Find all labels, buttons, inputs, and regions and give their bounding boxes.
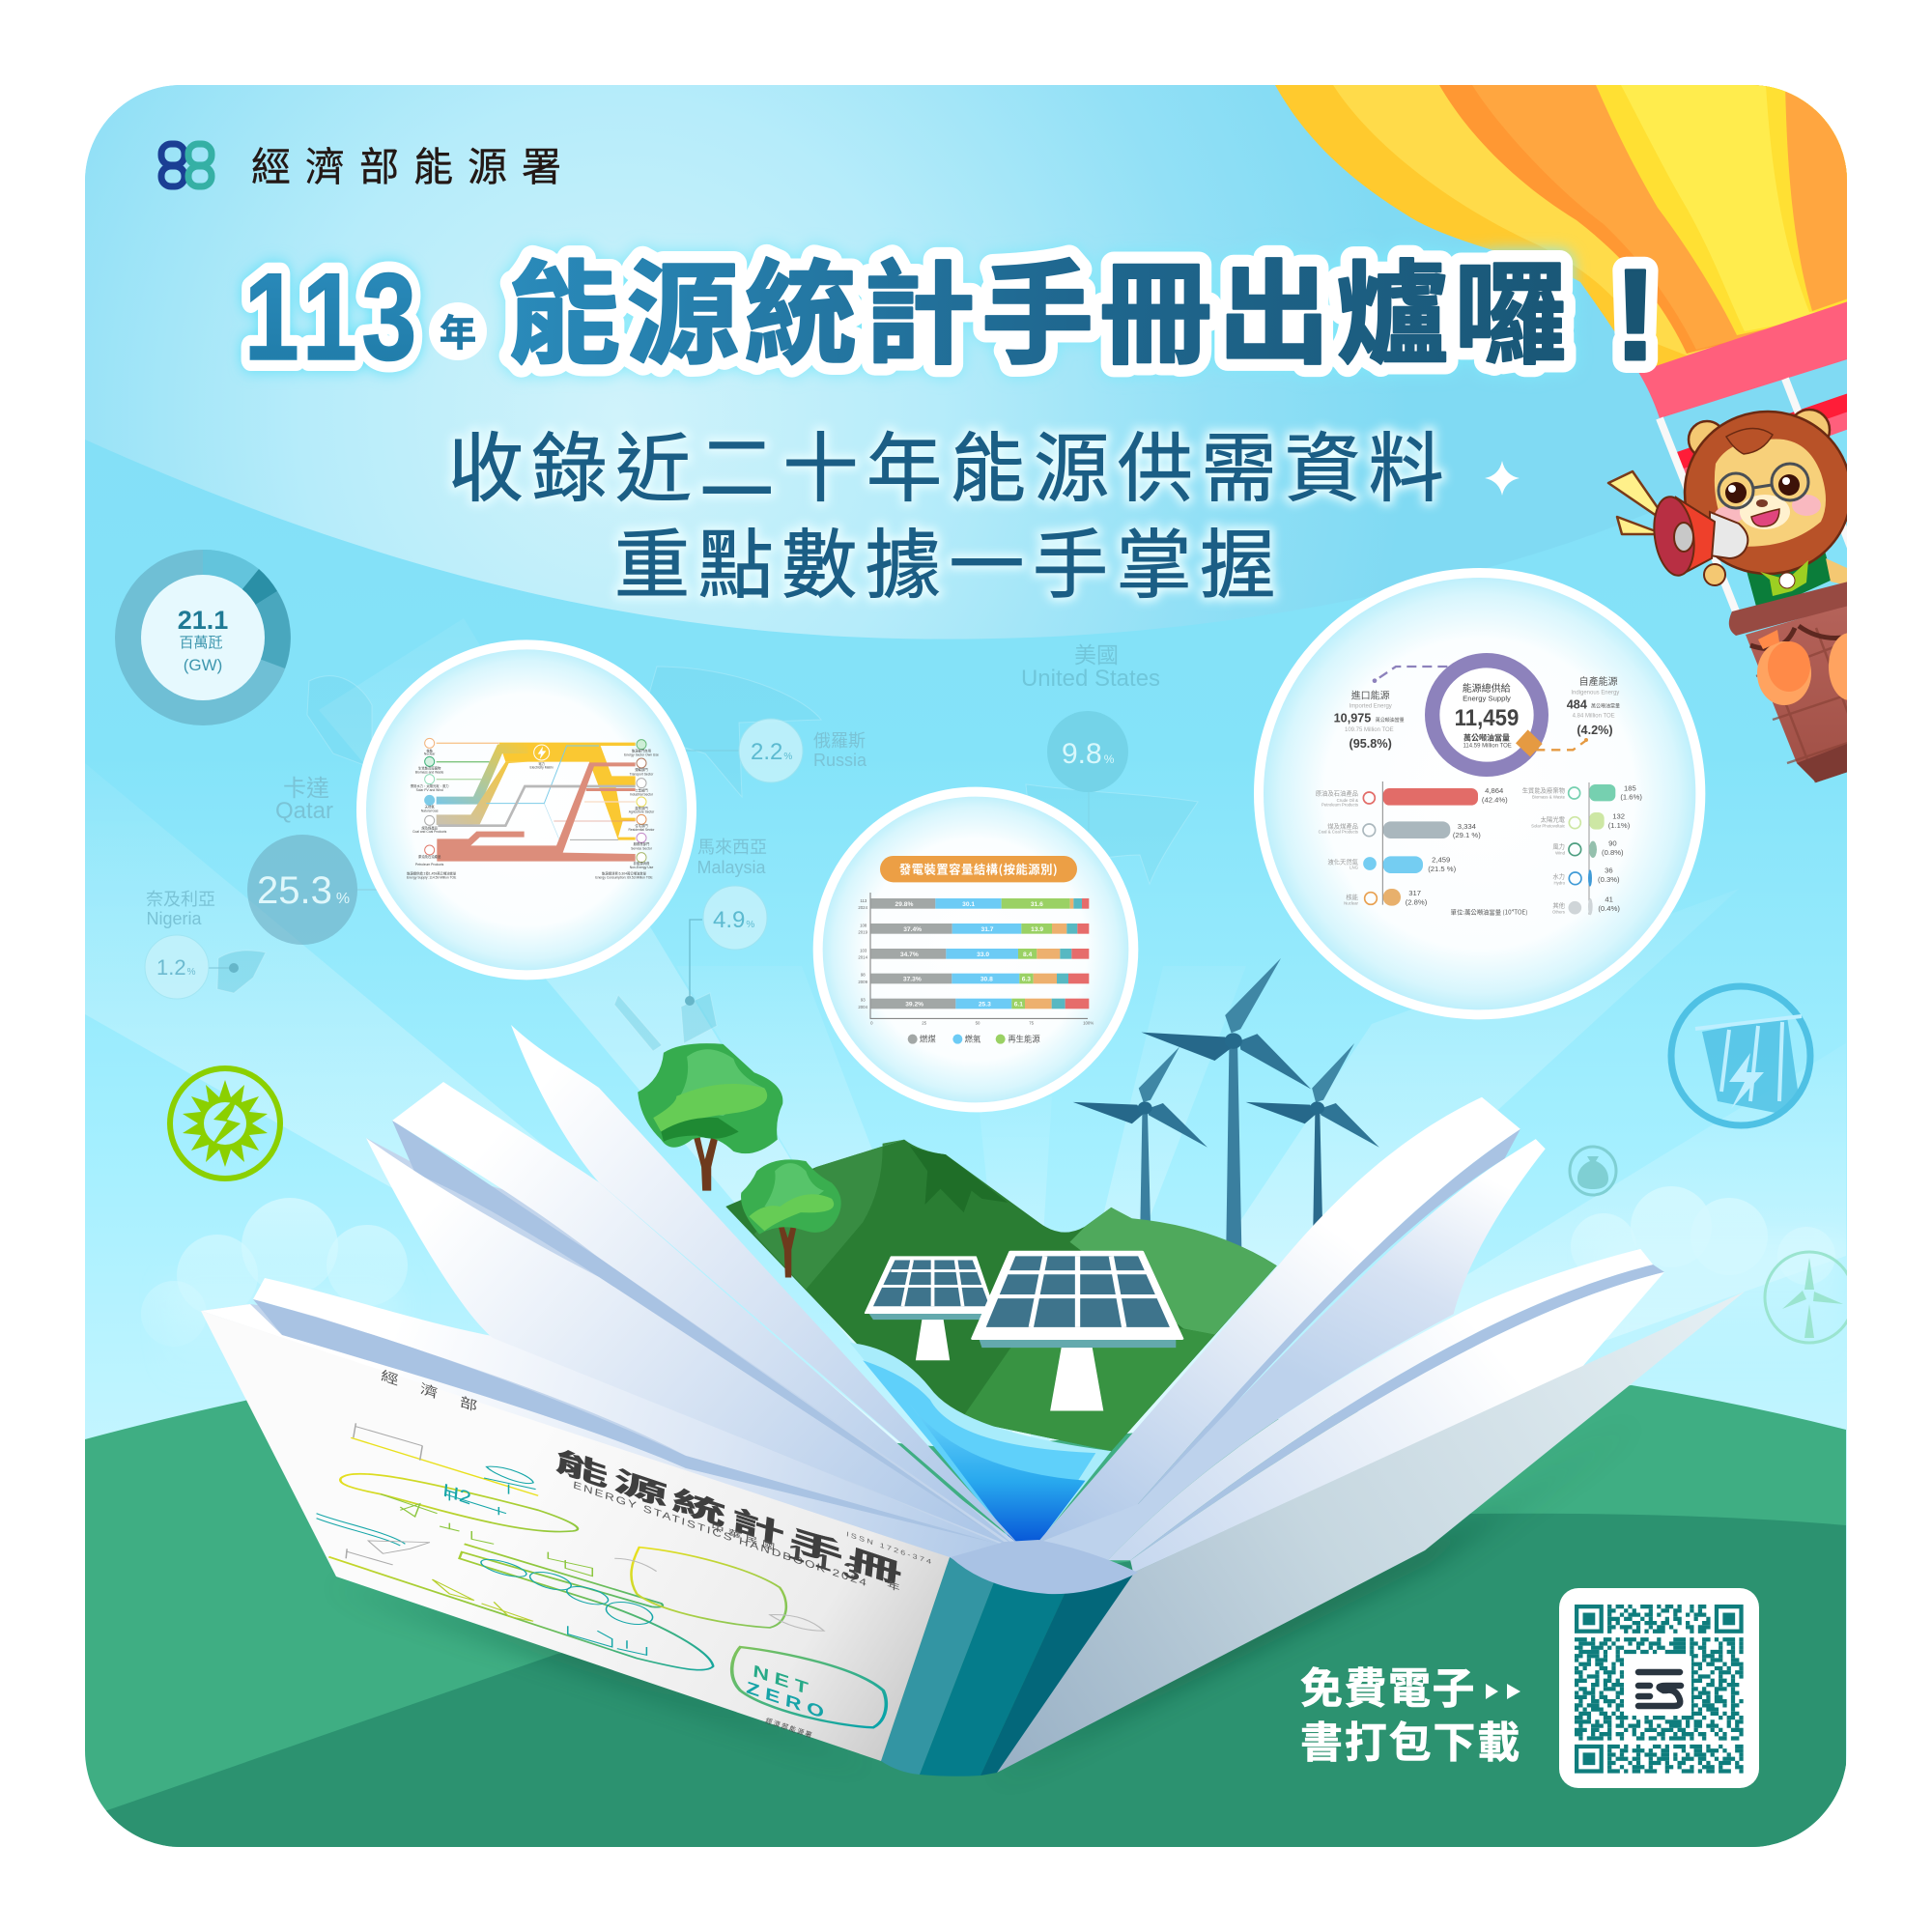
title main: 能源統計手冊出爐囉 xyxy=(508,224,1573,386)
country stat: United States: 美國 xyxy=(1074,637,1119,669)
subtitle: 收錄近二十年能源供需資料 xyxy=(448,409,1452,517)
cover text: 經濟部 xyxy=(381,1364,500,1423)
imports bar chart: 原油及石油產品 xyxy=(1316,788,1358,797)
donut 21.1 GW: 21.1 xyxy=(178,606,228,635)
imported energy label: 109.75 Million TOE xyxy=(1345,727,1394,733)
stacked bars: 34.7% xyxy=(900,952,919,958)
indigenous bar chart: 185 xyxy=(1624,784,1636,793)
big circle: energy supply xyxy=(1259,573,1700,1014)
balloon red band xyxy=(1638,298,1860,418)
country stat: Russia xyxy=(676,719,867,782)
indigenous bar chart: 36 xyxy=(1605,867,1613,875)
imports bar chart: (29.1 %) xyxy=(1453,831,1481,839)
face xyxy=(1715,428,1826,547)
front cover xyxy=(201,1311,950,1761)
imports bar chart: Crude Oil & xyxy=(1337,798,1358,803)
indigenous bar chart: (0.8%) xyxy=(1602,848,1624,857)
dark green hill xyxy=(85,1514,1846,1847)
axes and tick labels: 93 xyxy=(861,998,866,1003)
country stat: Malaysia: 馬來西亞 xyxy=(697,834,767,859)
cover text: NET xyxy=(753,1662,814,1700)
icon: bag xyxy=(1570,1147,1616,1195)
imported energy label: (95.8%) xyxy=(1350,737,1392,751)
imports bar chart: (21.5 %) xyxy=(1428,865,1457,873)
country stat: Nigeria xyxy=(145,886,239,999)
country stat: United States: 9.8% xyxy=(1062,738,1115,770)
sankey labels: 服務業部門 xyxy=(634,841,650,846)
sankey labels: 電力 xyxy=(538,761,546,766)
icon: wind turbine xyxy=(1765,1252,1854,1343)
axes and tick labels: 103 xyxy=(860,948,867,952)
country stat: Qatar: 卡達 xyxy=(283,769,329,803)
country stat: Russia: 2.2% xyxy=(751,739,792,765)
indigenous bar chart: Hydro xyxy=(1553,880,1566,885)
sankey labels: Transport Sector xyxy=(630,772,654,776)
light green hill xyxy=(85,1385,1846,1847)
stacked bars: 31.6 xyxy=(1031,901,1043,908)
sankey labels: 能源總消費:6,304萬公噸油當量 xyxy=(602,870,647,875)
stacked bars: 33.0 xyxy=(977,952,989,958)
axes and tick labels: 75 xyxy=(1029,1021,1035,1026)
country stat: Nigeria: 1.2% xyxy=(156,955,196,980)
megaphone sound spikes xyxy=(1608,471,1669,534)
big circle: Sankey chart xyxy=(361,644,692,975)
upper light wave xyxy=(85,85,1277,639)
country stat: Qatar: Qatar xyxy=(275,798,333,824)
axes and tick labels: 2009 xyxy=(858,980,868,984)
stacked bars: 30.8 xyxy=(980,977,993,983)
icon: green sun bolt xyxy=(170,1068,280,1179)
sankey labels: 核能 xyxy=(426,748,434,753)
country stat: Russia: Russia xyxy=(813,751,867,770)
indigenous energy label: (4.2%) xyxy=(1577,724,1613,737)
imported energy label: 進口能源 xyxy=(1351,687,1390,701)
legend xyxy=(908,1034,1040,1045)
stacked bars: 31.7 xyxy=(981,926,994,933)
sankey labels: Service Sector xyxy=(631,846,653,850)
axes and tick labels: 2019 xyxy=(858,930,868,935)
imports bar chart: (42.4%) xyxy=(1482,796,1508,805)
call to action: 書打包下載 xyxy=(1300,1708,1521,1770)
axes and tick labels: 2024 xyxy=(858,905,868,910)
imports bar chart: 核能 xyxy=(1346,893,1359,901)
subtitle: 重點數據一手掌握 xyxy=(614,505,1284,613)
open book xyxy=(201,1025,1745,1777)
large turbine xyxy=(1141,958,1311,1250)
balloon ropes xyxy=(1660,379,1860,611)
logo mark xyxy=(161,144,212,186)
sankey labels: Energy Sector Own Use xyxy=(624,753,659,756)
indigenous bar chart: (0.3%) xyxy=(1598,875,1620,884)
indigenous bar chart: Others xyxy=(1552,909,1565,914)
right pages xyxy=(1037,1097,1664,1573)
legend: 燃氣 xyxy=(965,1034,980,1045)
chart title pill: 發電裝置容量結構(按能源別) xyxy=(899,861,1058,878)
book spine xyxy=(881,1540,1138,1776)
supply donut xyxy=(1373,661,1588,769)
sparkle xyxy=(1485,461,1520,496)
stacked bars: 8.4 xyxy=(1023,952,1033,958)
imports bar chart: Nuclear xyxy=(1344,900,1359,905)
indigenous bar chart: 90 xyxy=(1608,839,1617,848)
wind turbines xyxy=(1073,958,1379,1250)
country stat: Qatar: 25.3% xyxy=(257,869,350,912)
call to action xyxy=(1300,1654,1521,1770)
indigenous energy label: 484 xyxy=(1567,697,1587,711)
scarf and badge xyxy=(1760,558,1847,596)
chart title pill xyxy=(880,856,1077,882)
imported energy label: 萬公噸油當量 xyxy=(1376,717,1405,724)
axes and tick labels: 98 xyxy=(861,973,866,978)
stacked bars: 6.3 xyxy=(1022,977,1031,983)
sankey labels: Industrial Sector xyxy=(630,792,654,796)
supply donut: 114.59 Million TOE xyxy=(1463,744,1512,750)
basket xyxy=(1729,579,1871,782)
imported energy label xyxy=(1334,687,1405,751)
supply donut: Energy Supply xyxy=(1463,694,1511,702)
country stat: Malaysia: 4.9% xyxy=(713,907,754,933)
megaphone xyxy=(1649,495,1747,578)
sankey labels: Energy Consumption: 69.53 Million TOE xyxy=(595,875,653,879)
indigenous bar chart: 其他 xyxy=(1552,900,1566,909)
arrows xyxy=(1486,1684,1520,1699)
country stat: Nigeria: 奈及利亞 xyxy=(146,886,215,911)
QR code xyxy=(1559,1588,1759,1788)
indigenous bar chart: 生質能及廢棄物 xyxy=(1522,786,1566,795)
supply donut: 萬公噸油當量 xyxy=(1463,732,1510,743)
indigenous bar chart: 41 xyxy=(1605,895,1613,903)
cover text: H2 xyxy=(442,1480,472,1509)
subtitle xyxy=(448,409,1452,613)
sankey labels: Solar PV and Wind xyxy=(416,788,443,792)
tree large xyxy=(638,1043,782,1191)
indigenous energy label: 自產能源 xyxy=(1579,673,1618,688)
axes and tick labels: 108 xyxy=(860,923,867,927)
country stat: Qatar xyxy=(247,769,425,945)
imports bar chart: 4,864 xyxy=(1485,786,1504,795)
axes and tick labels: 100% xyxy=(1083,1021,1094,1026)
mane and ears xyxy=(1685,410,1851,574)
indigenous bar chart: Biomass & Waste xyxy=(1532,795,1566,800)
supply donut: 能源總供給 xyxy=(1463,680,1511,695)
stacked bars xyxy=(871,898,1089,1009)
icon: blue building xyxy=(1671,986,1810,1125)
cover text: 經濟部能源署 xyxy=(764,1716,814,1741)
stacked bars: 30.1 xyxy=(962,901,975,908)
left turbine xyxy=(1073,1047,1208,1226)
axes and tick labels: 50 xyxy=(976,1021,980,1026)
indigenous bar chart: 風力 xyxy=(1552,841,1565,850)
imports bar chart: 3,334 xyxy=(1458,822,1477,831)
indigenous energy label xyxy=(1567,673,1620,737)
cover text: 113 xyxy=(786,1539,872,1590)
sankey labels: 能源部門自用 xyxy=(632,748,651,753)
axes and tick labels: 2004 xyxy=(858,1005,868,1009)
sankey labels: Electricity Matrix xyxy=(530,766,554,770)
sankey labels: Nuclear xyxy=(424,752,436,755)
country stat: United States xyxy=(1021,637,1160,831)
imports bar chart: 液化天然氣 xyxy=(1327,857,1359,866)
title year: 113 xyxy=(244,247,416,386)
title main: 能源統計手冊出爐囉 xyxy=(508,224,1573,386)
axes and tick labels: 0 xyxy=(870,1021,873,1026)
cover text: 能源統計手冊 xyxy=(554,1438,909,1595)
sankey labels: Agriculture Sector xyxy=(629,810,655,814)
title main: ! xyxy=(1614,243,1657,387)
sankey labels: 生質能及廢棄物 xyxy=(418,766,441,771)
supply donut: 11,459 xyxy=(1455,705,1519,731)
indigenous bar chart: 132 xyxy=(1612,812,1625,821)
country stat: United States: United States xyxy=(1021,666,1160,692)
legend: 燃煤 xyxy=(920,1034,936,1045)
back cover xyxy=(997,1292,1745,1773)
big circle: power capacity bar chart xyxy=(818,792,1133,1107)
sankey labels: 煤及煤產品 xyxy=(421,825,439,830)
hills xyxy=(85,1385,1846,1847)
world map background xyxy=(217,667,1198,1051)
indigenous bar chart: (0.4%) xyxy=(1598,904,1620,913)
sankey nodes xyxy=(425,738,646,863)
imports bar chart: LNG xyxy=(1350,866,1359,870)
QR centre mark xyxy=(1638,1672,1681,1706)
sankey labels: 農業部門 xyxy=(635,806,648,810)
shirt xyxy=(1744,536,1833,613)
sankey labels: 運輸部門 xyxy=(635,767,648,772)
axes and tick labels xyxy=(858,893,1094,1026)
country stat: Malaysia xyxy=(685,834,767,1006)
cover text: ZERO xyxy=(746,1678,830,1724)
stacked bars: 37.3% xyxy=(903,977,922,983)
imports bar chart xyxy=(1316,781,1508,906)
indigenous bar chart: (1.6%) xyxy=(1620,793,1642,802)
imports bar chart: 2,459 xyxy=(1432,856,1450,865)
imports bar chart: Coal & Coal Products xyxy=(1319,830,1358,835)
title year: 113 xyxy=(244,247,416,386)
sankey labels: 工業部門 xyxy=(635,787,648,792)
river xyxy=(850,1343,1111,1546)
sankey flows xyxy=(437,743,636,862)
imports bar chart: 煤及煤產品 xyxy=(1327,821,1358,830)
stacked bars: 39.2% xyxy=(905,1002,923,1009)
country stat: Russia: 俄羅斯 xyxy=(813,727,866,753)
imports bar chart: (2.8%) xyxy=(1406,897,1428,906)
cover text: ISSN 1726-374 xyxy=(846,1530,934,1567)
title main: ! xyxy=(1614,243,1657,387)
sankey labels: Non-Energy Use xyxy=(630,866,653,869)
title main: 能源統計手冊出爐囉 xyxy=(508,224,1573,386)
call to action: 免費電子 xyxy=(1300,1654,1476,1716)
left pages xyxy=(201,1025,1024,1570)
sankey labels: 住宅部門 xyxy=(635,823,648,828)
stacked bars: 29.8% xyxy=(895,901,914,908)
imported energy label: 10,975 xyxy=(1334,711,1371,724)
cover text: ENERGY STATISTICS HANDBOOK 2024 xyxy=(573,1479,868,1589)
cover text xyxy=(381,1364,934,1741)
indigenous energy label: Indigenous Energy xyxy=(1571,690,1619,696)
lion hand xyxy=(1704,564,1725,585)
indigenous bar chart: (1.1%) xyxy=(1608,821,1631,830)
right turbine xyxy=(1246,1043,1379,1230)
stacked bars: 25.3 xyxy=(979,1002,991,1009)
cover line art xyxy=(317,1423,886,1727)
hot air balloon envelope xyxy=(1275,85,1860,418)
title year: 113 xyxy=(244,247,416,386)
stacked bars: 6.1 xyxy=(1014,1002,1023,1009)
mountains xyxy=(725,1140,1277,1451)
donut 21.1 GW: (GW) xyxy=(184,656,222,674)
sankey labels: Residential Sector xyxy=(628,828,655,832)
imports bar chart: 317 xyxy=(1408,889,1421,897)
light rays from the book xyxy=(85,636,1846,1443)
indigenous bar chart: Wind xyxy=(1555,850,1566,855)
donut 21.1 GW xyxy=(115,550,291,725)
donut 21.1 GW: 百萬瓩 xyxy=(179,632,223,652)
small solar panel xyxy=(866,1257,995,1360)
book drop shadow xyxy=(995,1420,1642,1777)
sankey labels: 慣常水力、太陽光電、風力 xyxy=(411,783,449,788)
indigenous bar chart: 太陽光電 xyxy=(1541,815,1566,824)
cover text: 中華民國 xyxy=(711,1520,780,1554)
sankey labels: 原油及石油產品 xyxy=(418,854,441,859)
country stat: Malaysia: Malaysia xyxy=(696,858,766,877)
lion mascot in basket xyxy=(1608,410,1871,782)
indigenous bar chart xyxy=(1451,782,1642,916)
landscape inside the book xyxy=(638,1043,1277,1546)
sankey labels: 能源總供給:1億1,459萬公噸油當量 xyxy=(407,870,457,875)
cover text: 年 xyxy=(887,1577,900,1595)
indigenous bar chart: Solar Photovoltaic xyxy=(1531,824,1566,829)
legend: 再生能源 xyxy=(1008,1034,1040,1045)
sankey labels xyxy=(407,748,659,879)
imported energy label: Imported Energy xyxy=(1350,704,1392,710)
stacked bars: 37.4% xyxy=(903,926,922,933)
sankey labels: Biomass and Waste xyxy=(415,771,444,775)
logo xyxy=(158,141,559,189)
sankey labels: 非能源消費 xyxy=(634,861,650,866)
imports bar chart: Petroleum Products xyxy=(1321,803,1358,808)
indigenous bar chart: 單位:萬公噸油當量 (10⁴TOE) xyxy=(1451,907,1527,916)
sankey labels: Natural Gas xyxy=(421,809,439,812)
axes and tick labels: 113 xyxy=(860,898,867,903)
agency name: 經濟部能源署 xyxy=(251,134,576,192)
subtitle: 重點數據一手掌握 xyxy=(614,505,1284,613)
sankey labels: Energy Supply: 114.59 Million TOE xyxy=(407,875,457,879)
axes and tick labels: 25 xyxy=(922,1021,927,1026)
indigenous bar chart: 水力 xyxy=(1552,871,1565,880)
subtitle: 收錄近二十年能源供需資料 xyxy=(448,409,1452,517)
stacked bars: 13.9 xyxy=(1031,926,1043,933)
large solar panel xyxy=(973,1252,1182,1410)
title xyxy=(244,224,1657,387)
indigenous energy label: 4.84 Million TOE xyxy=(1573,714,1615,720)
sankey labels: 天然氣 xyxy=(425,805,435,810)
title year: 年 xyxy=(440,303,476,356)
sankey labels: Petroleum Products xyxy=(415,863,444,867)
sankey labels: Coal and Coal Products xyxy=(412,830,447,834)
axes and tick labels: 2014 xyxy=(858,954,868,959)
clouds xyxy=(141,1186,1846,1381)
tree small xyxy=(741,1159,841,1277)
country stat: Nigeria: Nigeria xyxy=(146,909,202,928)
indigenous energy label: 萬公噸油當量 xyxy=(1591,703,1620,710)
